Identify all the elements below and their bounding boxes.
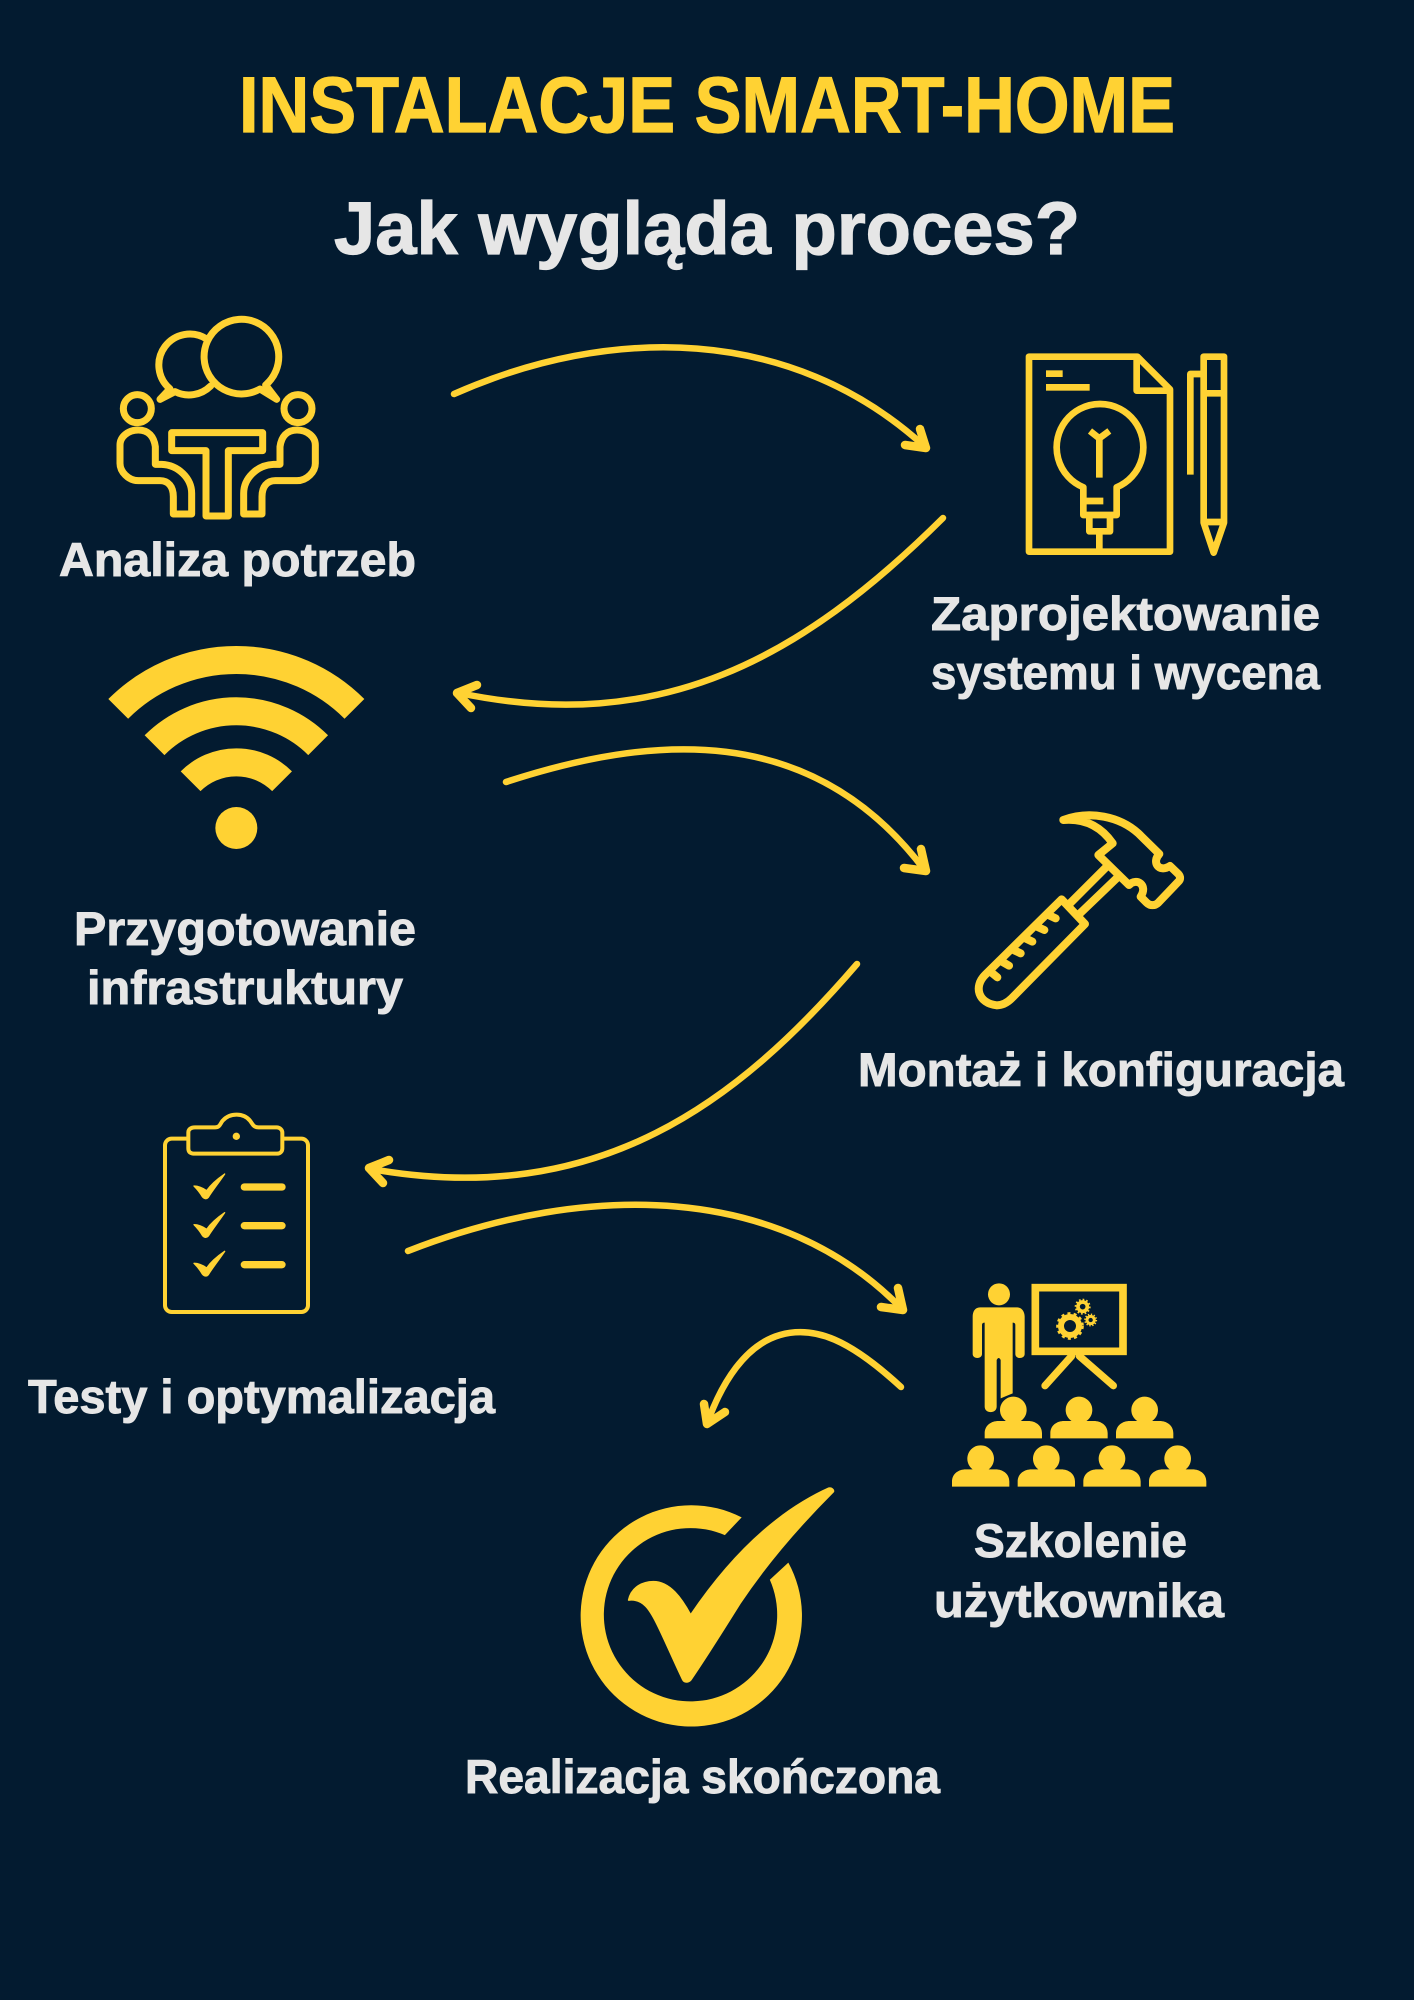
label: Zaprojektowanie [931,587,1320,640]
label: Przygotowanie [74,902,416,955]
icon: clipboard [165,1115,308,1312]
label: Realizacja skończona [465,1750,941,1803]
icon: trainer and audience [952,1283,1206,1487]
step: Szkolenie użytkownika [934,1283,1225,1627]
icon: wifi [118,660,354,849]
arrow 5 [408,1205,903,1310]
step: Przygotowanie infrastruktury [74,660,416,1014]
arrow 4 [369,964,857,1183]
icon: meeting at table [120,319,315,516]
icon: check in circle [581,1488,833,1727]
step: Montaż i konfiguracja [858,815,1345,1096]
arrow 6 [704,1332,901,1424]
label: Szkolenie [974,1514,1187,1567]
step: Analiza potrzeb [59,319,416,586]
step: Realizacja skończona [465,1488,941,1803]
icon: document with bulb and pencil [1029,357,1224,553]
arrow 2 [457,518,943,708]
arrow 1 [454,347,926,448]
label: Analiza potrzeb [59,533,416,586]
icon: hammer [979,815,1180,1005]
label: użytkownika [934,1574,1225,1627]
label [934,1514,1225,1627]
arrow 3 [506,749,926,871]
label: Montaż i konfiguracja [858,1043,1345,1096]
label: systemu i wycena [931,646,1321,699]
label [74,902,416,1014]
title: INSTALACJE SMART-HOME [239,60,1175,149]
step: Zaprojektowanie systemu i wycena [931,357,1321,699]
label [931,587,1321,699]
label: Testy i optymalizacja [28,1370,496,1423]
label: infrastruktury [87,961,403,1014]
step: Testy i optymalizacja [28,1115,496,1423]
subtitle: Jak wygląda proces? [334,187,1080,270]
